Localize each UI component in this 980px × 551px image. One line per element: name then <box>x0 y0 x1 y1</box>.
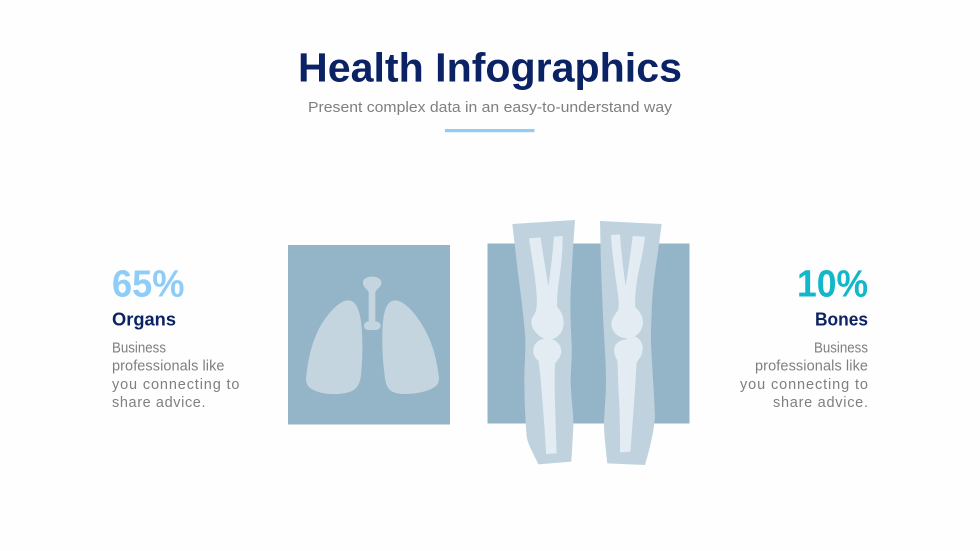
icon: knee x-rays <box>512 220 662 465</box>
icon: lungs <box>306 277 439 394</box>
percentage: 65%: 65% <box>112 264 184 306</box>
text block: organs description: share advice. <box>112 395 206 411</box>
text block: organs description: Business <box>112 340 166 356</box>
text block: organs description: professionals like <box>112 359 224 375</box>
right tibia <box>614 336 643 452</box>
panel: lungs image <box>288 245 450 424</box>
lungs background square <box>288 245 450 424</box>
right lung <box>382 300 439 394</box>
left tibia <box>533 338 561 454</box>
text block: organs description <box>112 340 240 411</box>
right femur <box>611 234 645 338</box>
trachea <box>363 277 381 330</box>
text block: organs description: you connecting to <box>112 377 240 393</box>
text block: bones description: share advice. <box>773 395 868 411</box>
title: Health Infographics <box>298 44 682 90</box>
percentage: 10%: 10% <box>797 264 868 306</box>
left leg <box>512 220 575 464</box>
accent bar <box>445 129 534 132</box>
heading: Bones: Bones <box>815 310 868 330</box>
left lung <box>306 300 362 394</box>
text block: bones description <box>740 340 868 411</box>
subtitle: Present complex data in an easy-to-understand way <box>308 99 673 116</box>
panel: knee x-ray image <box>488 220 690 465</box>
left femur <box>529 236 564 339</box>
heading: Organs: Organs <box>112 310 176 330</box>
right leg <box>600 221 662 465</box>
x-ray background rectangle <box>488 244 690 424</box>
panel: organs statistic <box>112 264 240 411</box>
text block: bones description: you connecting to <box>740 377 868 393</box>
panel: bones statistic <box>740 264 868 411</box>
text block: bones description: professionals like <box>755 359 868 375</box>
text block: bones description: Business <box>814 340 868 356</box>
